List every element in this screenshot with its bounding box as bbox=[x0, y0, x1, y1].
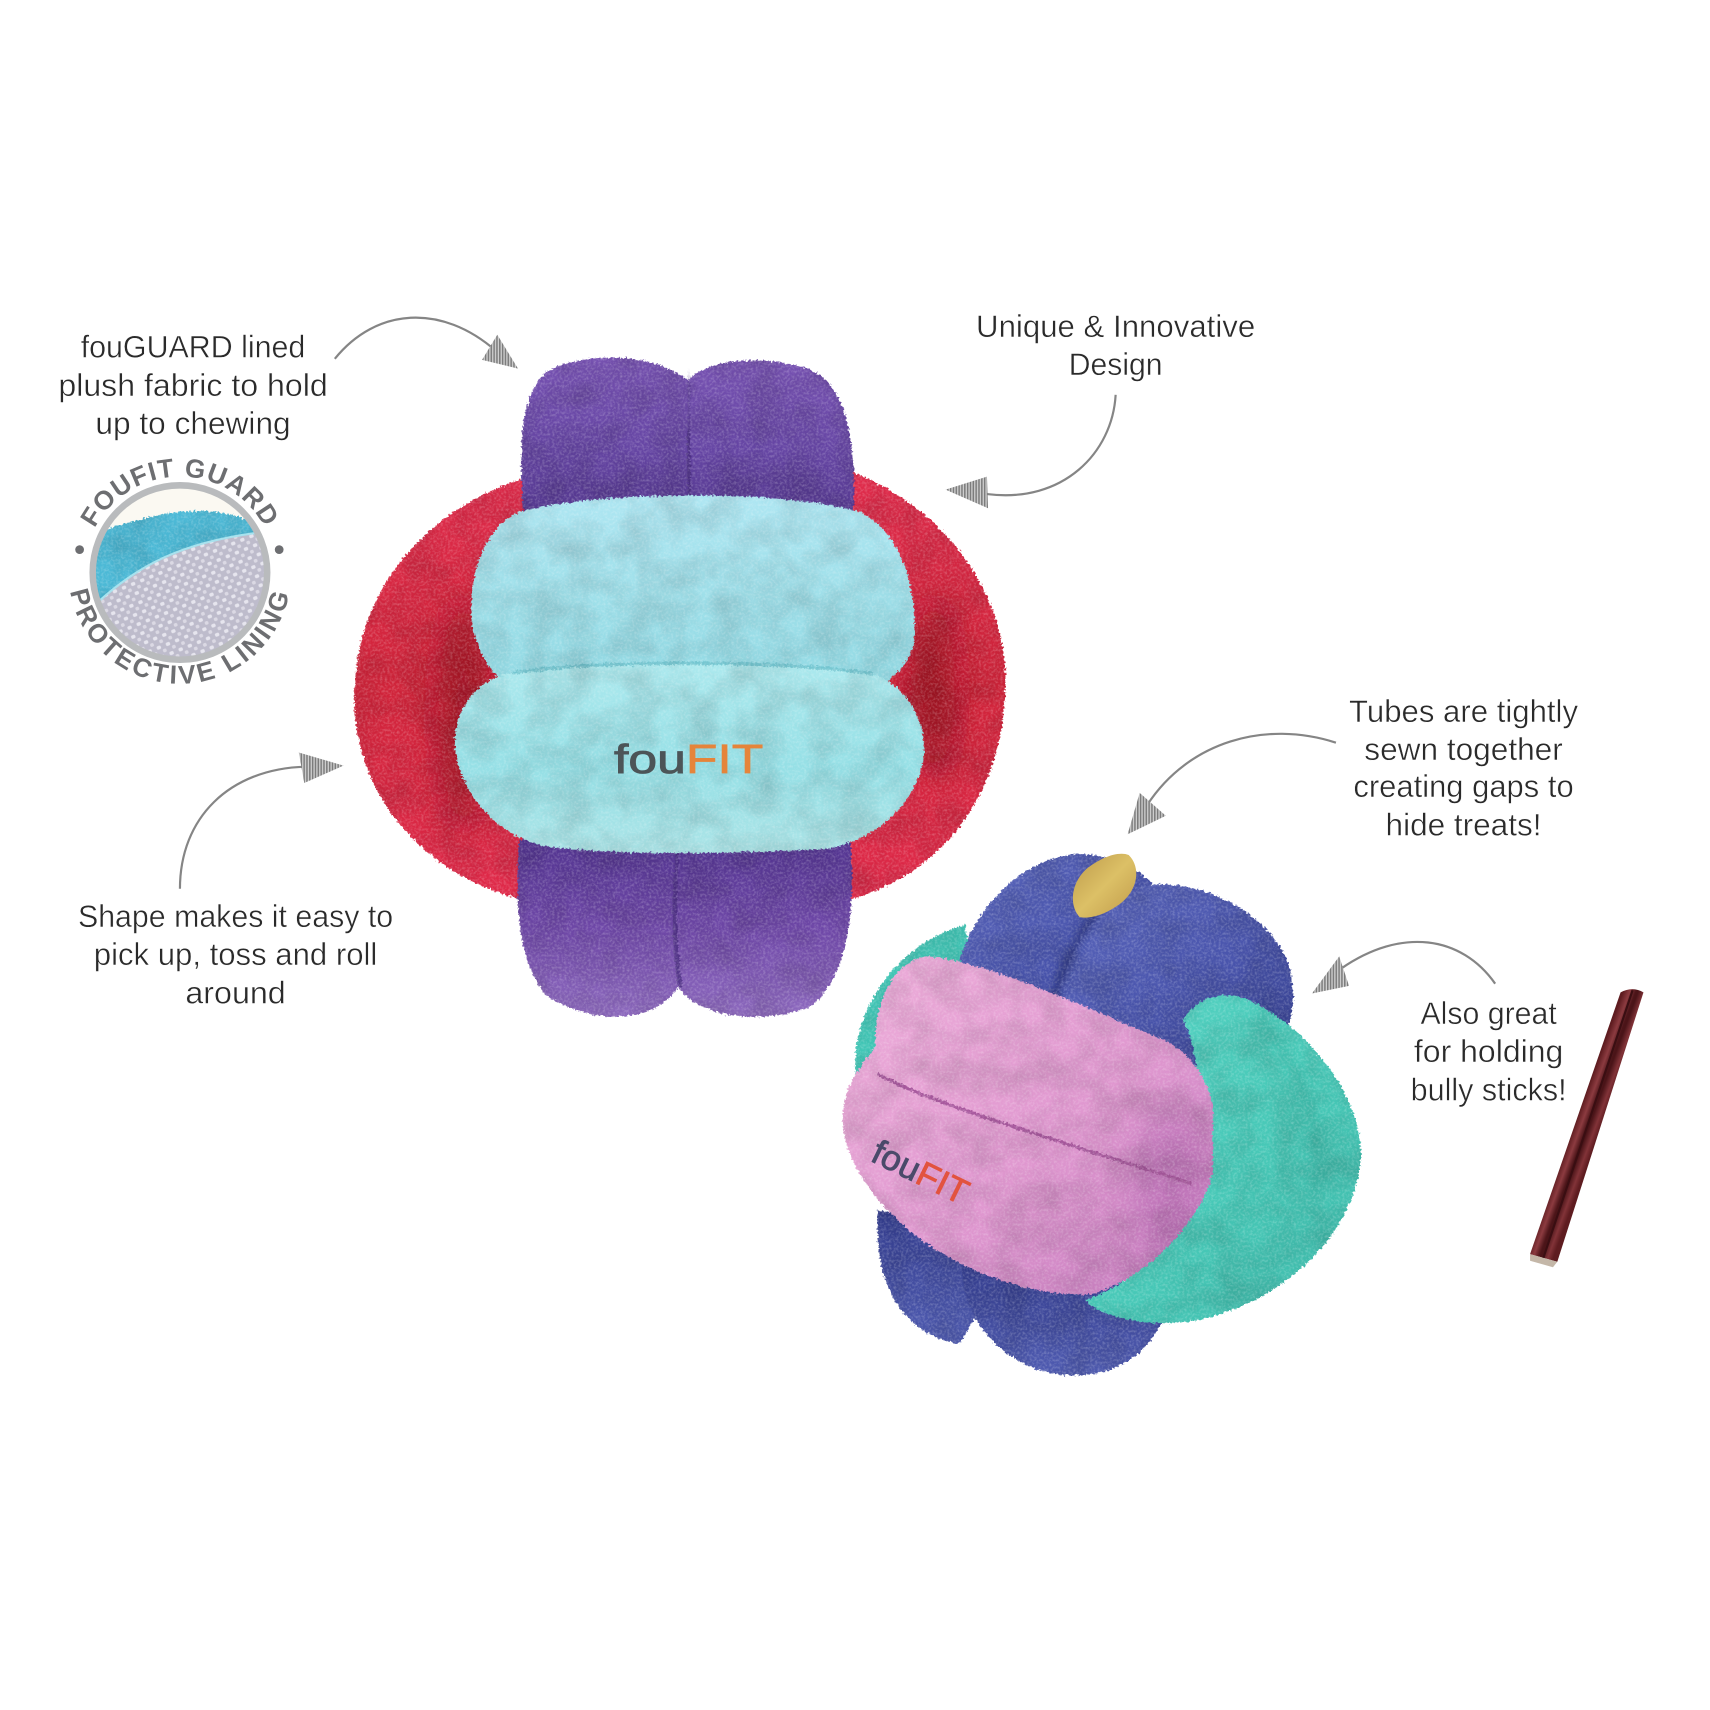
arrow: shape to ball bbox=[180, 752, 344, 889]
callout: fouGUARD lining: plush fabric to hold bbox=[58, 367, 328, 403]
callout: shape: Shape makes it easy to bbox=[78, 898, 393, 934]
callout: unique design bbox=[976, 308, 1255, 382]
navy top-right lobe bbox=[1052, 884, 1293, 1080]
arrow: bully sticks to ball bbox=[1312, 942, 1495, 994]
badge text top: FOUFIT GUARD bbox=[80, 458, 276, 527]
callout: bully sticks: for holding bbox=[1414, 1033, 1563, 1069]
treat bbox=[1073, 854, 1136, 918]
arrow: tubes to treat bbox=[1128, 734, 1336, 834]
embroidered fouFIT logo, angled: fouFIT bbox=[866, 1132, 975, 1212]
aqua lower tube bbox=[455, 663, 924, 853]
navy bottom lobes bbox=[877, 1211, 1169, 1375]
callout: shape: around bbox=[185, 974, 286, 1010]
teal right tube bbox=[1086, 995, 1361, 1323]
callout: bully sticks: Also great bbox=[1420, 995, 1557, 1031]
red outer tubes bbox=[354, 471, 1005, 900]
arrow: design to ball bbox=[946, 395, 1116, 508]
arrow: fouGUARD to ball bbox=[335, 318, 518, 369]
callout: tubes: Tubes are tightly bbox=[1349, 693, 1578, 729]
callout: unique design: Design bbox=[1069, 346, 1163, 382]
callout: tubes: sewn together bbox=[1364, 731, 1563, 767]
product: angled view plush ball bbox=[843, 854, 1361, 1375]
callout: tubes: creating gaps to bbox=[1353, 768, 1574, 804]
callout: fouGUARD lining bbox=[58, 329, 328, 441]
aqua upper tube bbox=[471, 495, 915, 698]
badge text bottom: PROTECTIVE LINING bbox=[70, 588, 288, 684]
purple top lobes bbox=[521, 358, 854, 523]
teal back tube bbox=[855, 925, 982, 1134]
badge ring bbox=[93, 485, 267, 660]
badge dots bbox=[75, 545, 284, 554]
callout: fouGUARD lining: up to chewing bbox=[95, 405, 291, 441]
badge photo: fabric swatch bbox=[96, 488, 264, 656]
pink tubes bbox=[843, 956, 1213, 1295]
callout: tubes: hide treats! bbox=[1386, 806, 1542, 842]
callout: unique design: Unique & Innovative bbox=[976, 308, 1255, 344]
callout: bully sticks: bully sticks! bbox=[1411, 1071, 1567, 1107]
callout: bully sticks bbox=[1411, 995, 1567, 1107]
badge: foufit guard protective lining bbox=[70, 458, 288, 684]
embroidered fouFIT logo: fou FIT bbox=[614, 736, 763, 782]
callout: fouGUARD lining: fouGUARD lined bbox=[81, 329, 305, 365]
callout: shape: pick up, toss and roll bbox=[94, 936, 377, 972]
purple bottom lobes bbox=[518, 840, 852, 1017]
navy top-left lobe bbox=[960, 854, 1156, 1014]
product: front view plush ball bbox=[354, 358, 1005, 1017]
bully stick bbox=[1530, 989, 1643, 1267]
callout: tubes bbox=[1349, 693, 1578, 842]
callout: shape bbox=[78, 898, 393, 1010]
